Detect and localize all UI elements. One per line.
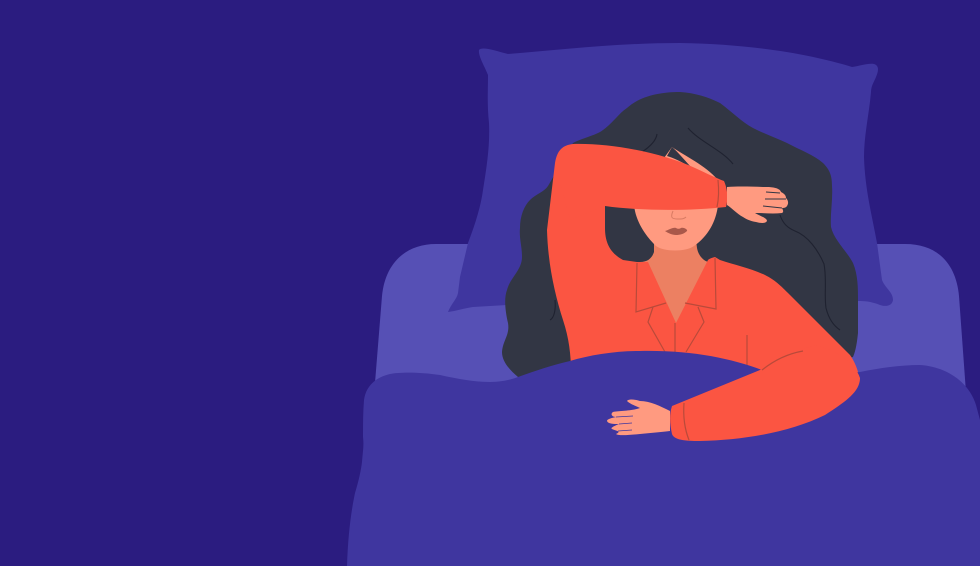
cuff line bbox=[684, 403, 689, 440]
mouth bbox=[665, 228, 687, 235]
headboard bbox=[372, 244, 968, 420]
raised forearm bbox=[555, 144, 727, 220]
lower hand bbox=[607, 400, 670, 435]
collar lines bbox=[636, 258, 747, 368]
forehead and hair parting bbox=[660, 147, 720, 200]
face bbox=[634, 147, 720, 326]
nose bbox=[672, 211, 686, 219]
cuff line bbox=[717, 180, 719, 207]
sleeve fold bbox=[762, 351, 803, 370]
blanket bbox=[347, 351, 980, 566]
hair bbox=[502, 92, 858, 400]
lower sleeve bbox=[670, 345, 860, 441]
hair strands bbox=[550, 128, 840, 330]
pillow bbox=[448, 43, 893, 312]
pyjama torso bbox=[547, 163, 860, 390]
raised hand bbox=[727, 187, 788, 223]
lower face bbox=[634, 205, 718, 250]
neck bbox=[640, 240, 708, 326]
